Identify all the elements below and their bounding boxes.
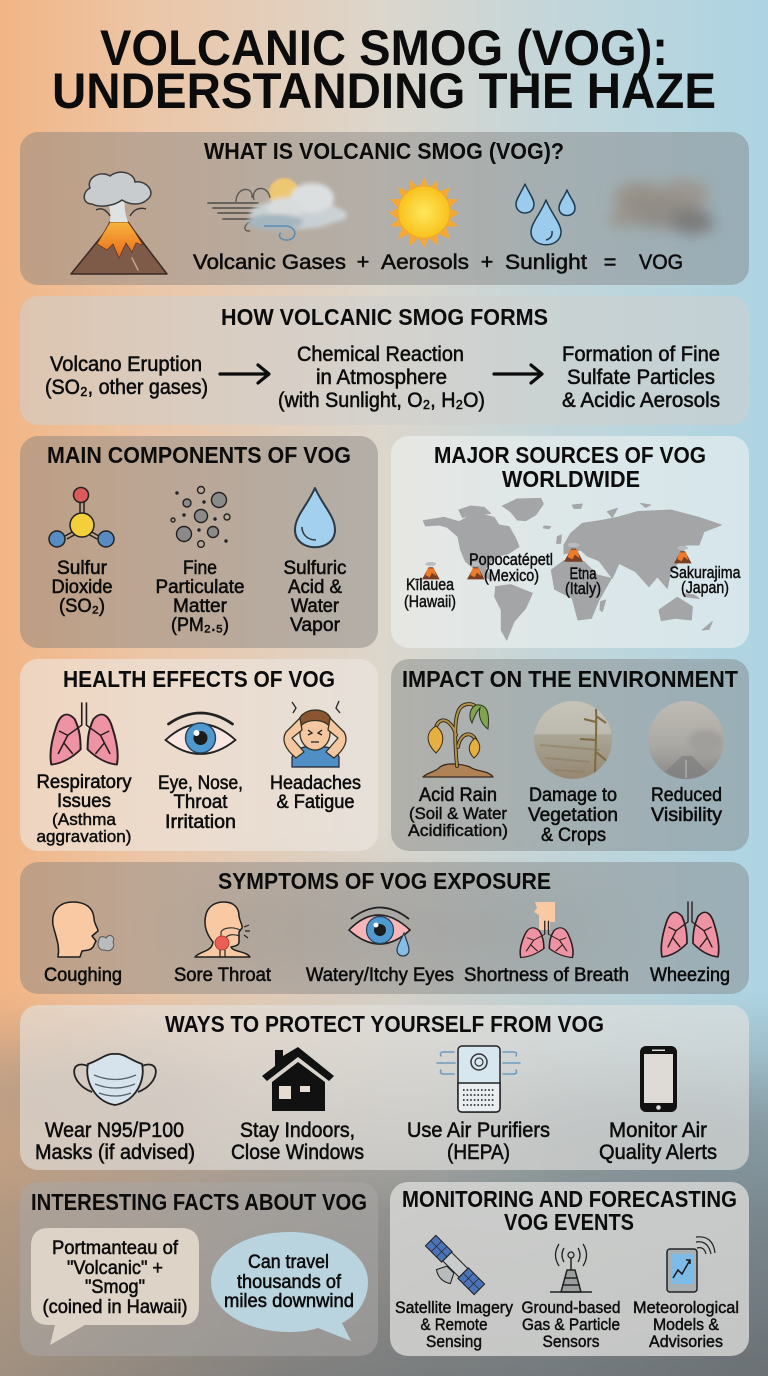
label: ground sensors: Sensors bbox=[542, 1332, 600, 1351]
callout: portmanteau: "Smog" bbox=[85, 1276, 145, 1298]
equation text bbox=[193, 250, 683, 274]
marker: Sakurajima: (Japan) bbox=[681, 578, 729, 597]
panel: health effects bbox=[20, 659, 378, 851]
label: sulfuric acid and vapor: Water bbox=[291, 595, 339, 617]
icon: sore throat bbox=[195, 902, 250, 957]
icon: wind and cloud bbox=[208, 178, 347, 240]
label: monitor alerts bbox=[599, 1118, 717, 1164]
equation text: Volcanic Gases bbox=[193, 250, 346, 274]
marker: Kilauea: (Hawaii) bbox=[404, 592, 456, 611]
label: ground sensors: Gas & Particle bbox=[522, 1315, 620, 1334]
panel: what is volcanic smog bbox=[20, 132, 749, 285]
icon: lungs bbox=[50, 703, 118, 765]
label: respiratory issues: Issues bbox=[57, 790, 111, 812]
callout: travel distance: thousands of bbox=[237, 1271, 342, 1293]
step: volcano eruption: (SO₂, other gases) bbox=[45, 375, 208, 399]
equation text: Aerosols bbox=[381, 250, 469, 274]
label: irritation bbox=[158, 772, 243, 833]
panel: interesting facts bbox=[20, 1182, 378, 1356]
icon: eye bbox=[166, 713, 236, 754]
equation text: = bbox=[604, 250, 616, 274]
heading: facts: INTERESTING FACTS ABOUT VOG bbox=[31, 1189, 367, 1215]
step: chemical reaction bbox=[278, 342, 485, 412]
callout: travel distance: miles downwind bbox=[224, 1290, 354, 1312]
label: respiratory issues bbox=[36, 771, 132, 846]
heading: major sources: WORLDWIDE bbox=[502, 466, 640, 492]
panel: ways to protect bbox=[20, 1005, 749, 1170]
icon: house bbox=[262, 1047, 334, 1111]
icon: particulate matter bbox=[171, 486, 230, 547]
label: wheezing: Wheezing bbox=[650, 964, 730, 986]
label: vegetation damage bbox=[528, 784, 618, 846]
icon: wilting plant bbox=[423, 704, 493, 777]
marker: Popocatepetl: Popocatépetl bbox=[469, 550, 553, 569]
label: sulfur dioxide bbox=[52, 557, 112, 617]
step: sulfate formation bbox=[562, 342, 720, 412]
equation text: Sunlight bbox=[505, 250, 587, 274]
label: headaches bbox=[270, 772, 361, 813]
label: shortness of breath: Shortness of Breath bbox=[464, 964, 629, 986]
photo: damaged crops bbox=[534, 701, 612, 779]
heading: protect: WAYS TO PROTECT YOURSELF FROM VOG bbox=[165, 1011, 604, 1037]
label: air purifiers bbox=[407, 1118, 550, 1164]
label: models: Advisories bbox=[649, 1332, 723, 1351]
step: chemical reaction: in Atmosphere bbox=[316, 365, 447, 389]
label: visibility bbox=[651, 784, 722, 826]
equation text: + bbox=[357, 250, 369, 274]
label: sulfur dioxide: Dioxide bbox=[52, 576, 112, 598]
icon: smartphone bbox=[640, 1046, 677, 1112]
step: chemical reaction: Chemical Reaction bbox=[297, 342, 464, 366]
step: volcano eruption bbox=[45, 352, 208, 399]
marker: Popocatepetl: (Mexico) bbox=[484, 566, 539, 585]
world map bbox=[423, 498, 721, 640]
label: irritation: Throat bbox=[174, 791, 228, 813]
callout: travel distance: Can travel bbox=[248, 1251, 329, 1273]
label: visibility: Reduced bbox=[651, 784, 722, 806]
icon: shortness of breath bbox=[520, 902, 573, 958]
label: watery eyes: Watery/Itchy Eyes bbox=[306, 964, 454, 986]
label: respiratory issues: aggravation) bbox=[36, 827, 132, 846]
heading: what is vog: WHAT IS VOLCANIC SMOG (VOG)? bbox=[204, 138, 564, 164]
panel: symptoms bbox=[20, 862, 749, 994]
label: acid rain: (Soil & Water bbox=[409, 804, 507, 823]
heading: symptoms: SYMPTOMS OF VOG EXPOSURE bbox=[218, 868, 551, 894]
heading: main components: MAIN COMPONENTS OF VOG bbox=[47, 442, 351, 468]
label: ground sensors bbox=[522, 1298, 620, 1351]
title bbox=[52, 20, 716, 119]
icon: satellite bbox=[417, 1235, 485, 1303]
label: models: Meteorological bbox=[633, 1298, 739, 1317]
equation text: + bbox=[481, 250, 493, 274]
label: sulfur dioxide: Sulfur bbox=[57, 557, 107, 579]
heading: environment: IMPACT ON THE ENVIRONMENT bbox=[402, 666, 738, 692]
callout: portmanteau: "Volcanic" + bbox=[67, 1257, 163, 1279]
photo: reduced visibility bbox=[648, 701, 724, 779]
label: acid rain: Acid Rain bbox=[419, 784, 497, 806]
label: satellite imagery: & Remote bbox=[420, 1315, 488, 1334]
label: particulate matter: Matter bbox=[173, 595, 227, 617]
label: acid rain: Acidification) bbox=[408, 821, 508, 840]
title: UNDERSTANDING THE HAZE bbox=[52, 63, 716, 119]
label: sulfuric acid and vapor: Vapor bbox=[290, 614, 340, 636]
label: ground sensors: Ground-based bbox=[522, 1298, 620, 1317]
heading: major sources: MAJOR SOURCES OF VOG bbox=[434, 442, 706, 468]
label: vegetation damage: Damage to bbox=[529, 784, 617, 806]
marker: Kilauea: Kīlauea bbox=[406, 575, 454, 594]
callout: portmanteau: (coined in Hawaii) bbox=[42, 1296, 188, 1318]
icon: sulfur dioxide molecule bbox=[49, 488, 114, 547]
label: respiratory issues: Respiratory bbox=[36, 771, 132, 793]
label: sulfuric acid and vapor: Sulfuric bbox=[284, 557, 347, 579]
step: sulfate formation: Formation of Fine bbox=[562, 342, 720, 366]
label: respiratory issues: (Asthma bbox=[52, 810, 117, 829]
label: monitor alerts: Quality Alerts bbox=[599, 1140, 717, 1164]
icon: coughing head bbox=[53, 902, 114, 957]
marker: Etna bbox=[564, 543, 601, 598]
icon: acid water drop bbox=[295, 488, 335, 547]
step: chemical reaction: (with Sunlight, O₂, H₂O) bbox=[278, 388, 485, 412]
panel: how volcanic smog forms bbox=[20, 296, 749, 425]
icon: wheezing lungs bbox=[661, 902, 719, 957]
label: masks: Masks (if advised) bbox=[35, 1140, 195, 1164]
icon: air purifier bbox=[437, 1046, 520, 1112]
marker: Popocatepetl bbox=[467, 550, 553, 585]
label: headaches: Headaches bbox=[270, 772, 361, 794]
label: models: Models & bbox=[653, 1315, 720, 1334]
heading: how it forms: HOW VOLCANIC SMOG FORMS bbox=[221, 304, 548, 330]
heading: health effects: HEALTH EFFECTS OF VOG bbox=[63, 666, 335, 692]
marker: Kilauea bbox=[404, 562, 456, 611]
label: stay indoors: Close Windows bbox=[231, 1140, 364, 1164]
icon: forecast tablet bbox=[667, 1237, 715, 1292]
marker: Etna: (Italy) bbox=[565, 579, 601, 598]
heading: major sources bbox=[434, 442, 706, 492]
label: sulfuric acid and vapor: Acid & bbox=[288, 576, 342, 598]
marker: Sakurajima bbox=[670, 546, 741, 597]
label: vegetation damage: Vegetation bbox=[528, 804, 618, 826]
label: sulfur dioxide: (SO₂) bbox=[59, 595, 105, 617]
label: satellite imagery: Satellite Imagery bbox=[395, 1298, 513, 1317]
arrow: reaction to particles bbox=[494, 365, 542, 383]
icon: person with headache bbox=[284, 701, 346, 767]
panel: main components bbox=[20, 436, 378, 648]
equation text: VOG bbox=[639, 250, 683, 274]
callout: travel distance bbox=[211, 1232, 368, 1341]
step: sulfate formation: Sulfate Particles bbox=[567, 365, 715, 389]
icon: volcano bbox=[71, 172, 167, 274]
label: masks bbox=[35, 1118, 195, 1164]
label: sore throat: Sore Throat bbox=[174, 964, 272, 986]
label: particulate matter bbox=[156, 557, 244, 636]
label: satellite imagery: Sensing bbox=[426, 1332, 482, 1351]
icon: vog cloud bbox=[609, 180, 714, 234]
icon: water droplets bbox=[516, 184, 575, 245]
label: vegetation damage: & Crops bbox=[541, 824, 606, 846]
label: stay indoors: Stay Indoors, bbox=[240, 1118, 355, 1142]
heading: monitoring bbox=[402, 1186, 737, 1235]
label: models bbox=[633, 1298, 739, 1351]
label: satellite imagery bbox=[395, 1298, 513, 1351]
marker: Sakurajima: Sakurajima bbox=[670, 563, 741, 582]
label: coughing: Coughing bbox=[44, 964, 122, 986]
heading: monitoring: VOG EVENTS bbox=[504, 1209, 634, 1235]
callout: portmanteau bbox=[31, 1228, 199, 1345]
label: stay indoors bbox=[231, 1118, 364, 1164]
label: masks: Wear N95/P100 bbox=[45, 1118, 184, 1142]
label: irritation: Irritation bbox=[165, 811, 236, 833]
label: irritation: Eye, Nose, bbox=[158, 772, 243, 794]
callout: portmanteau: Portmanteau of bbox=[52, 1237, 179, 1259]
marker: Etna: Etna bbox=[570, 564, 597, 583]
label: monitor alerts: Monitor Air bbox=[609, 1118, 707, 1142]
title: VOLCANIC SMOG (VOG): bbox=[100, 20, 668, 76]
label: acid rain bbox=[408, 784, 508, 840]
label: headaches: & Fatigue bbox=[276, 791, 354, 813]
icon: face mask bbox=[74, 1054, 156, 1105]
label: air purifiers: (HEPA) bbox=[447, 1140, 510, 1164]
panel: monitoring and forecasting bbox=[390, 1182, 749, 1356]
label: particulate matter: Particulate bbox=[156, 576, 244, 598]
step: volcano eruption: Volcano Eruption bbox=[50, 352, 202, 376]
arrow: eruption to reaction bbox=[220, 365, 269, 383]
icon: sensor tower bbox=[550, 1244, 592, 1292]
icon: sun bbox=[389, 177, 459, 248]
panel: major sources worldwide bbox=[391, 436, 749, 648]
panel: impact on environment bbox=[391, 659, 749, 851]
label: visibility: Visibility bbox=[651, 804, 722, 826]
label: particulate matter: (PM₂.₅) bbox=[171, 614, 229, 636]
icon: watery eye bbox=[349, 908, 410, 956]
label: air purifiers: Use Air Purifiers bbox=[407, 1118, 550, 1142]
label: particulate matter: Fine bbox=[183, 557, 217, 579]
step: sulfate formation: & Acidic Aerosols bbox=[562, 388, 720, 412]
label: sulfuric acid and vapor bbox=[284, 557, 347, 636]
